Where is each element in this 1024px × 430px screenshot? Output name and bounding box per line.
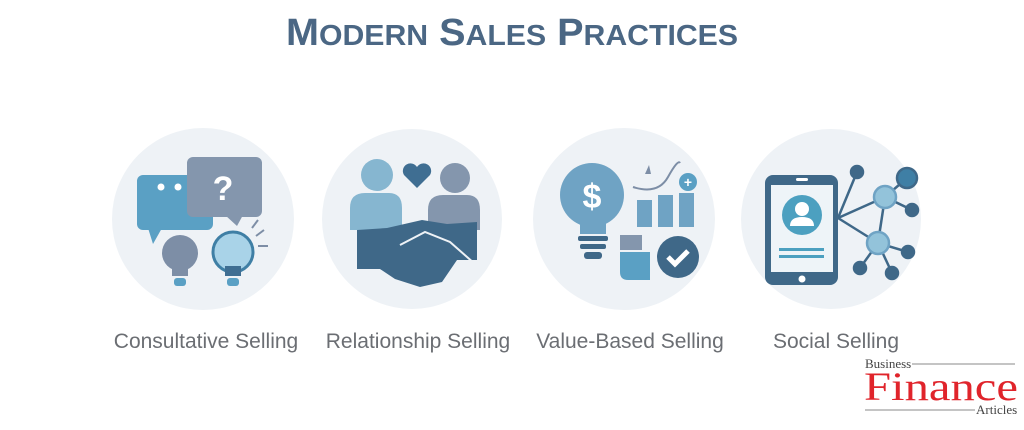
icon: network (838, 166, 918, 279)
icon: checks (620, 235, 699, 280)
logo: Finance (864, 364, 1018, 409)
title: MODERN SALES PRACTICES (286, 12, 738, 54)
logo: Business (865, 356, 911, 371)
icon: bar chart: + (684, 174, 692, 190)
icon: people and heart (350, 159, 480, 230)
panel: value-based selling (533, 128, 724, 353)
logo: Articles (976, 402, 1017, 417)
panel: relationship selling (322, 129, 510, 353)
label: Relationship Selling (326, 330, 510, 353)
icon: bar chart (633, 162, 697, 227)
icon: question bubble (187, 157, 262, 226)
icon: dollar bulb (560, 163, 624, 259)
panel: consultative selling (112, 128, 298, 353)
label: Social Selling (773, 330, 899, 353)
icon: bulbs (162, 220, 268, 286)
label: Value-Based Selling (536, 330, 724, 353)
icon: question bubble: ? (213, 170, 233, 208)
logo (864, 356, 1018, 417)
label: Consultative Selling (114, 330, 298, 353)
panel: social selling (741, 129, 921, 353)
icon: handshake (357, 220, 477, 287)
icon: tablet (765, 175, 838, 285)
icon: blue speech bubble (137, 175, 213, 244)
icon: dollar bulb: $ (583, 178, 602, 216)
